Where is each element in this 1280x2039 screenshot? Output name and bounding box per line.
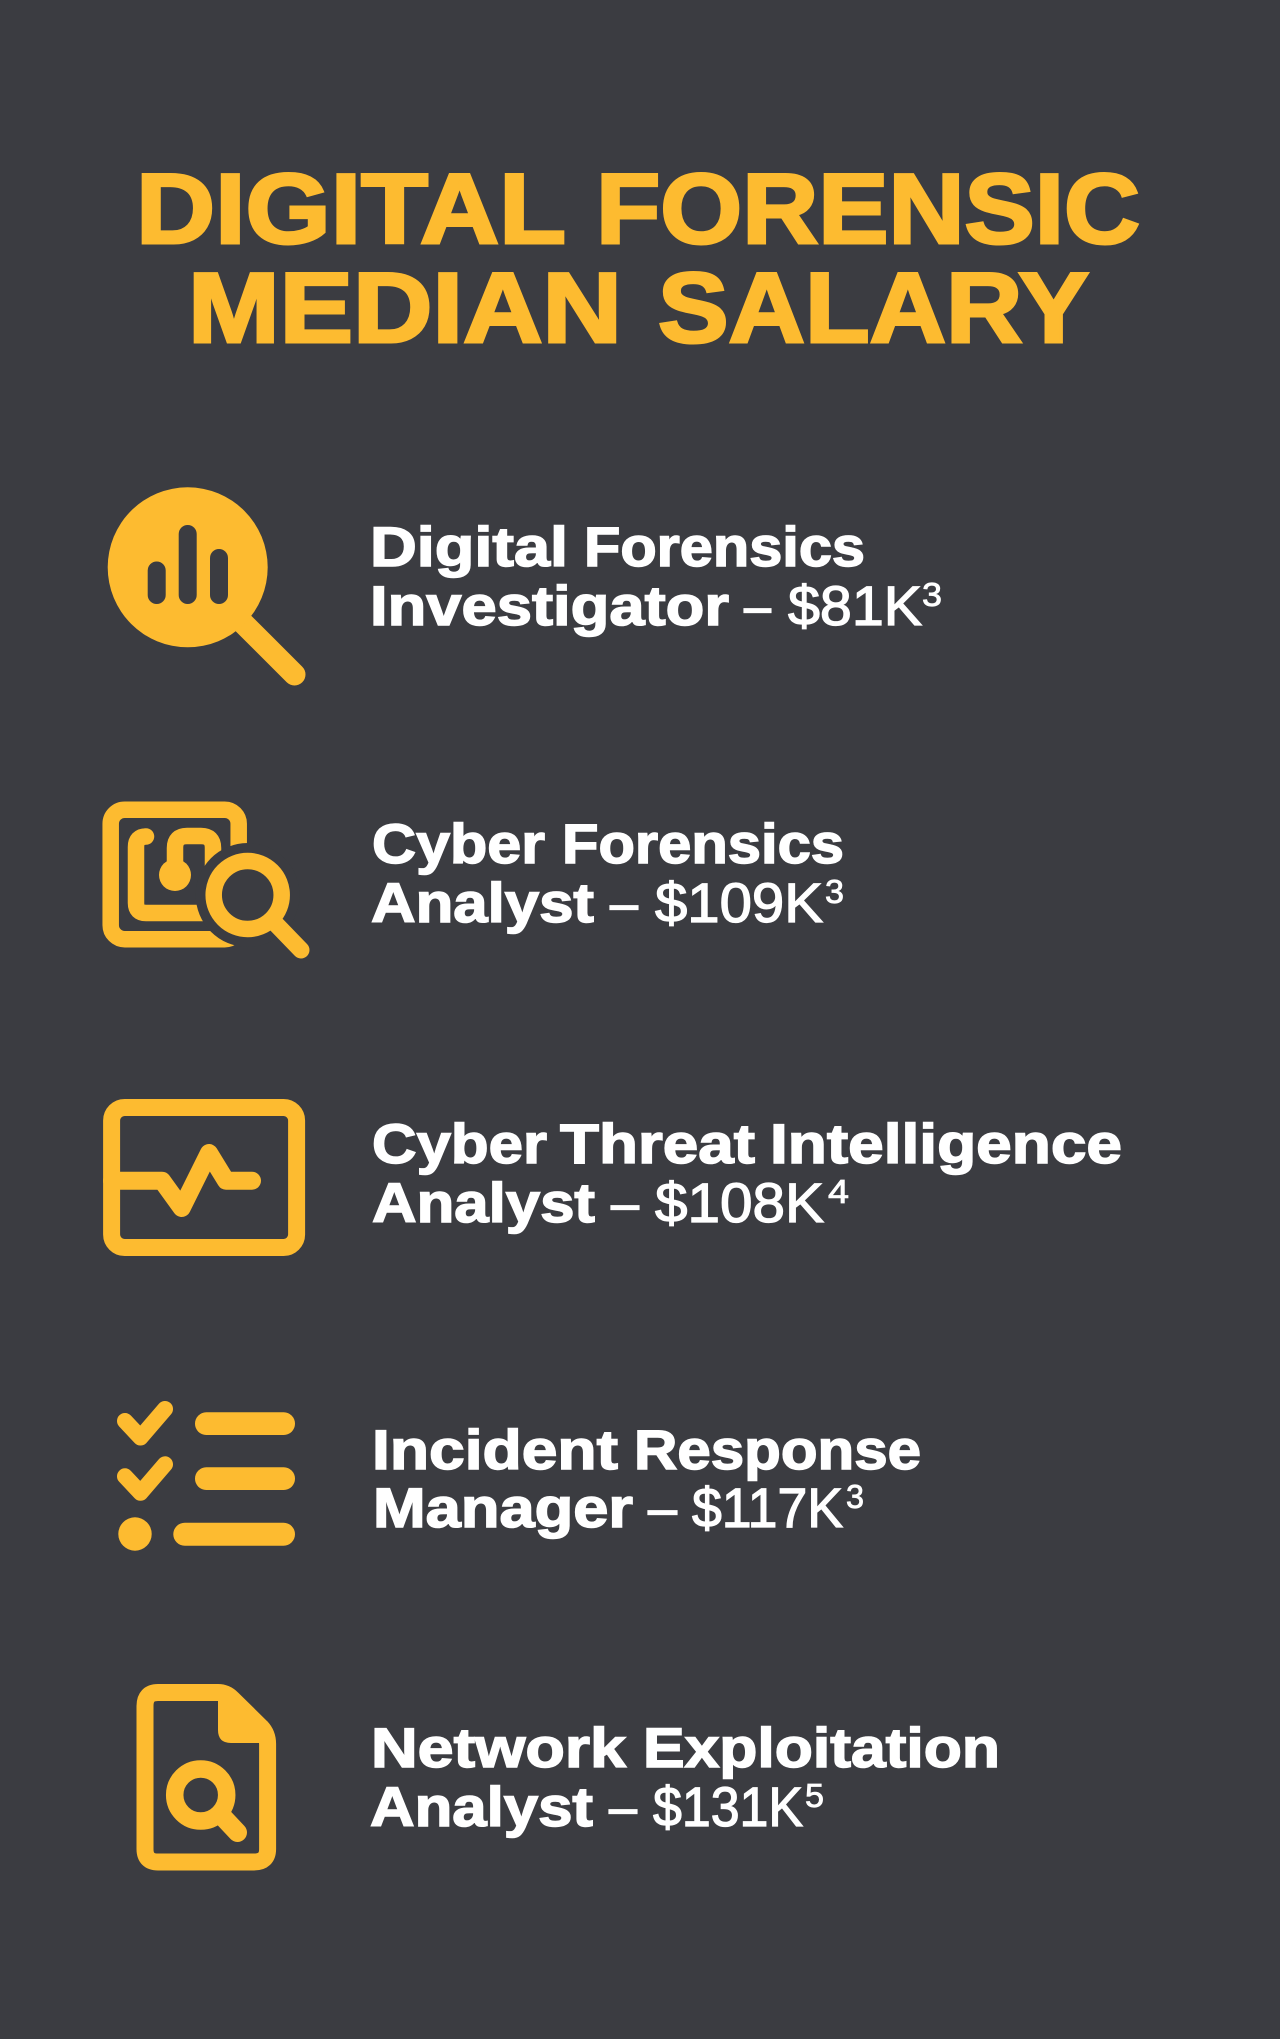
label: incident response manager $117K: Incident (372, 1418, 618, 1481)
title: MEDIAN (188, 252, 622, 363)
label: network exploitation analyst $131K: – (609, 1775, 638, 1838)
title: SALARY (658, 252, 1089, 363)
label: digital forensics investigator $81K: Digital (370, 515, 568, 578)
label: cyber forensics analyst $109K (371, 812, 844, 934)
label: incident response manager $117K: $117K (692, 1476, 843, 1539)
label: network exploitation analyst $131K (370, 1716, 1000, 1838)
label: incident response manager $117K: 3 (846, 1478, 864, 1515)
label: cyber threat intelligence analyst $108K: $108K (655, 1171, 824, 1234)
item: cyber threat intelligence analyst (112, 1108, 1122, 1248)
label: digital forensics investigator $81K: 3 (922, 576, 942, 613)
icon: monitor with pulse line (112, 1108, 297, 1248)
label: incident response manager $117K (372, 1418, 921, 1539)
icon: checklist (118, 1409, 295, 1551)
label: incident response manager $117K: Response (634, 1418, 921, 1481)
label: network exploitation analyst $131K: Network (371, 1716, 627, 1779)
label: cyber forensics analyst $109K: Cyber (372, 812, 545, 875)
title (136, 153, 1140, 363)
item: incident response manager (118, 1409, 921, 1551)
item: digital forensics investigator (108, 487, 942, 674)
label: cyber threat intelligence analyst $108K: 4 (828, 1173, 849, 1210)
label: network exploitation analyst $131K: 5 (805, 1777, 824, 1814)
label: network exploitation analyst $131K: Exploitation (643, 1716, 1000, 1779)
label: cyber forensics analyst $109K: 3 (825, 873, 844, 910)
label: cyber threat intelligence analyst $108K (372, 1112, 1122, 1234)
label: digital forensics investigator $81K: – (744, 574, 772, 637)
label: cyber threat intelligence analyst $108K: – (611, 1171, 640, 1234)
label: cyber threat intelligence analyst $108K: Intelligence (770, 1112, 1122, 1175)
label: digital forensics investigator $81K: Forensics (584, 515, 865, 578)
label: cyber forensics analyst $109K: $109K (655, 871, 823, 934)
item: network exploitation analyst (145, 1692, 1000, 1862)
label: incident response manager $117K: – (648, 1476, 678, 1539)
icon: magnifier with bar chart (108, 487, 294, 674)
label: network exploitation analyst $131K: Analyst (370, 1775, 593, 1838)
label: digital forensics investigator $81K: $81K (788, 574, 922, 637)
label: digital forensics investigator $81K (370, 515, 942, 637)
label: cyber forensics analyst $109K: Forensics (562, 812, 844, 875)
label: network exploitation analyst $131K: $131K (653, 1775, 803, 1838)
title: DIGITAL (136, 153, 566, 264)
label: cyber forensics analyst $109K: – (610, 871, 639, 934)
label: incident response manager $117K: Manager (373, 1476, 633, 1539)
label: cyber threat intelligence analyst $108K: Analyst (372, 1171, 595, 1234)
label: cyber threat intelligence analyst $108K: Threat (560, 1112, 755, 1175)
label: cyber forensics analyst $109K: Analyst (371, 871, 594, 934)
icon: document with magnifier (145, 1692, 268, 1862)
icon: circuit board with magnifier (111, 810, 301, 950)
label: cyber threat intelligence analyst $108K: Cyber (372, 1112, 547, 1175)
item: cyber forensics analyst (111, 810, 844, 950)
label: digital forensics investigator $81K: Investigator (370, 574, 729, 637)
title: FORENSIC (596, 153, 1140, 264)
